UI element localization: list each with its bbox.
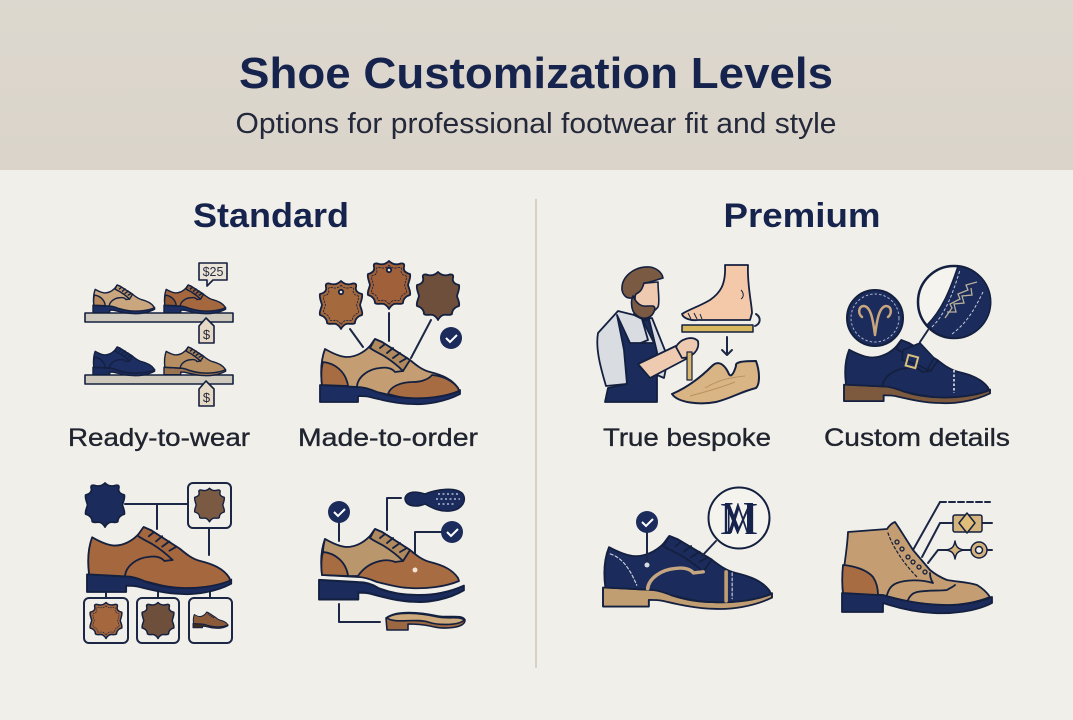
down arrow <box>722 337 732 355</box>
ring option <box>971 542 987 558</box>
leather swatch 2 <box>368 261 410 309</box>
zodiac patch <box>847 290 903 346</box>
icon: made-to-order shoe and leather swatches <box>320 261 462 404</box>
buckle option <box>953 513 982 533</box>
icon: custom details shoe <box>844 266 991 403</box>
apron <box>605 315 657 402</box>
icon: boot with hardware options <box>842 502 992 613</box>
price bubble <box>199 263 227 286</box>
hands <box>676 338 698 358</box>
price tag top: $ <box>203 327 211 342</box>
leather swatch 1 <box>320 281 362 329</box>
connector lines <box>106 504 210 598</box>
outsole <box>405 489 464 511</box>
strap and buckle <box>902 343 934 370</box>
heading: Standard: Standard <box>193 197 349 235</box>
label: Custom details: Custom details <box>824 424 1010 452</box>
price tag top <box>199 318 214 343</box>
wooden last <box>672 361 759 403</box>
star option <box>946 541 964 559</box>
midsole <box>319 580 464 602</box>
swatch box: dark leather <box>137 598 179 643</box>
leader lines <box>913 502 940 550</box>
monk strap shoe <box>844 340 990 403</box>
shoe <box>320 339 460 404</box>
connector lines <box>339 498 442 622</box>
eyelets <box>895 540 927 574</box>
neck and face <box>634 282 659 316</box>
connector lines <box>350 313 431 358</box>
leather swatch 3 <box>417 272 459 320</box>
craftsman <box>597 267 698 402</box>
monogram callout <box>702 488 770 556</box>
beard <box>632 296 655 318</box>
foot <box>682 265 752 320</box>
label: True bespoke: True bespoke <box>603 424 771 452</box>
toe cap stitching <box>953 370 955 393</box>
shoe: navy <box>93 347 155 376</box>
check badge left <box>328 501 350 523</box>
shoe: brown <box>164 285 226 314</box>
icon: material options diagram <box>84 483 232 643</box>
check badge right <box>441 521 463 543</box>
monogram callout: M <box>720 493 758 544</box>
swatch box: small shoe <box>189 598 232 643</box>
icon: sole and component options <box>319 489 465 630</box>
navy hide <box>85 483 125 527</box>
heading: Premium: Premium <box>724 197 880 235</box>
shoe <box>603 536 772 609</box>
boot <box>842 522 992 613</box>
curved arrow <box>755 314 760 326</box>
icon: bespoke fitting <box>597 265 760 403</box>
header band <box>0 0 1073 170</box>
label: Made-to-order: Made-to-order <box>298 424 478 452</box>
shelf top <box>85 313 233 322</box>
tape measure <box>687 352 692 380</box>
check badge <box>440 327 462 349</box>
shoe upper <box>321 529 459 588</box>
price tag bottom <box>199 381 214 406</box>
swatch box: stitched leather <box>84 598 128 643</box>
monogram callout: M <box>724 493 754 544</box>
ruler <box>682 325 753 332</box>
shirt <box>597 311 648 386</box>
icon: monogram shoe <box>603 488 772 609</box>
hair <box>622 267 663 298</box>
subtitle: Options for professional footwear fit and style <box>236 108 836 140</box>
price bubble: $25 <box>203 265 223 279</box>
leader line <box>920 330 928 342</box>
label: Ready-to-wear: Ready-to-wear <box>68 424 250 452</box>
shoe: tan <box>93 285 155 314</box>
check pin <box>636 511 658 568</box>
far arm sleeve <box>640 318 668 378</box>
swatch box: dark hide <box>188 483 231 528</box>
insole <box>386 612 465 630</box>
forearm <box>638 344 688 378</box>
stitching magnifier <box>918 266 991 338</box>
shoe <box>87 527 231 594</box>
shelf bottom <box>85 375 233 384</box>
icon: ready-to-wear shelves <box>85 263 233 406</box>
title: Shoe Customization Levels <box>239 49 833 98</box>
leather dot <box>412 568 418 572</box>
price tag bottom: $ <box>203 390 211 405</box>
shoe: light brown <box>164 347 226 376</box>
